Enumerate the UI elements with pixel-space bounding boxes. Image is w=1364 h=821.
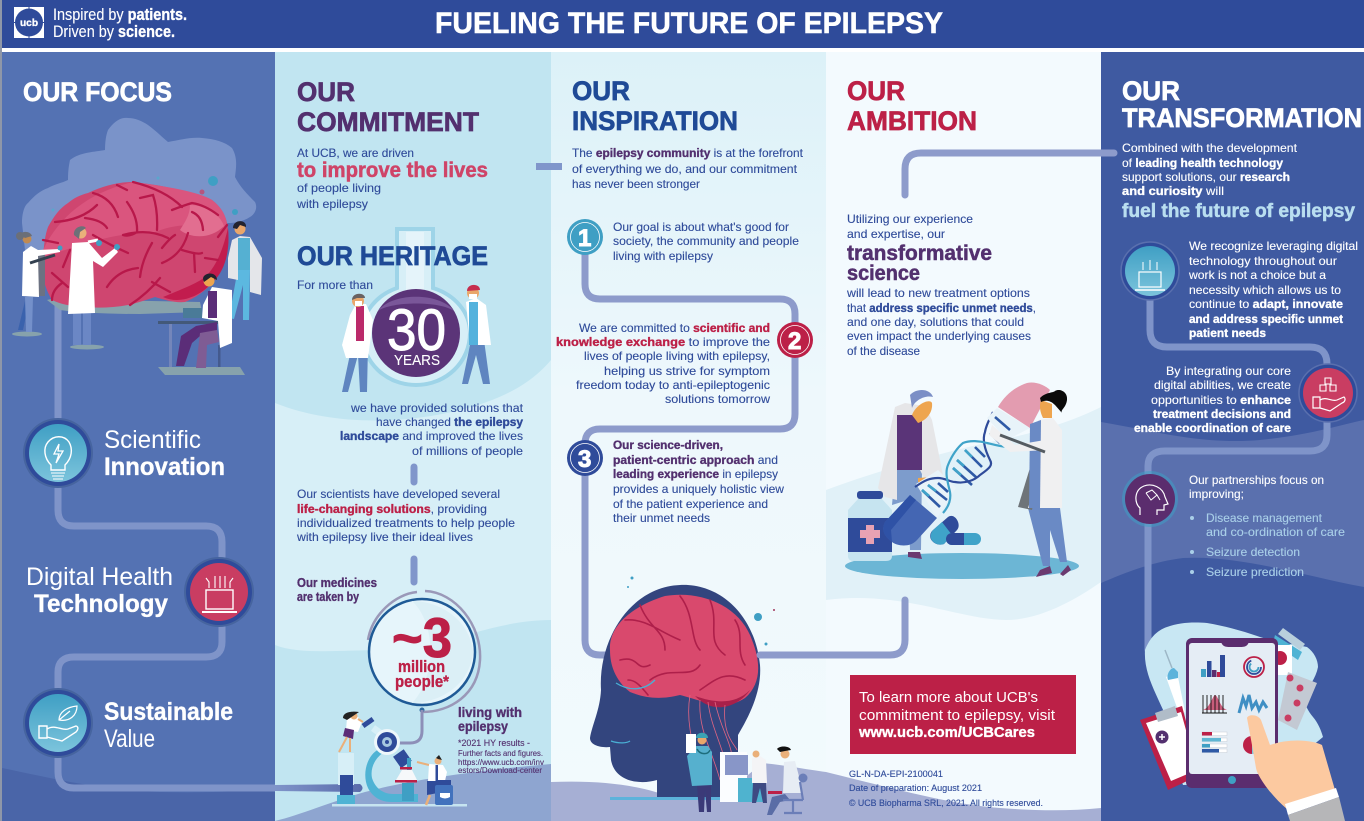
text: digital technology: and address specific unmet [1189, 312, 1343, 326]
legal footer [849, 769, 1043, 808]
text: commitment statement [296, 146, 488, 211]
text: item 2: knowledge exchange to improve the [556, 335, 770, 349]
text: digital technology: necessity which allows us to [1189, 283, 1341, 297]
scientist: man with tie [417, 755, 453, 805]
text: ambition body: will lead to new treatment options [846, 286, 1030, 300]
footnote: *2021 HY results - [458, 738, 530, 748]
doctor [686, 733, 712, 812]
magnifier: 3 million people: million [398, 657, 445, 676]
illustration: brain and scientists [12, 118, 262, 375]
donut chart [1244, 657, 1264, 677]
text: heritage body: landscape and improved the lives [340, 429, 523, 443]
icon: scientific innovation [23, 418, 93, 488]
connector: to magnifier [410, 559, 418, 582]
hand [1247, 715, 1345, 821]
text: item 1: Our goal is about what's good for [613, 220, 789, 234]
heading: our commitment: COMMITMENT [297, 107, 479, 137]
panel: our transformation [1101, 52, 1364, 821]
heading: our inspiration [572, 76, 738, 136]
DNA helix [915, 412, 1010, 513]
text: ambition body: of the disease [847, 344, 920, 358]
heading: our commitment: OUR [297, 77, 355, 107]
UCB logo [14, 7, 44, 38]
magnifier: 3 million people [368, 591, 480, 712]
text: ambition body: and expertise, our [847, 227, 945, 241]
text: digital abilities [1134, 364, 1291, 435]
scientist: left woman [878, 390, 945, 559]
heading: our ambition: OUR [847, 76, 905, 106]
heading: our transformation: OUR [1122, 76, 1180, 106]
scientist: woman on stool [339, 712, 373, 752]
call to action box: www.ucb.com/UCBCares [858, 724, 1035, 741]
text: our medicines: are taken by [297, 590, 359, 604]
text: partnerships: Our partnerships focus on [1189, 473, 1324, 487]
illustration: head with brain [590, 576, 808, 815]
syringe [1165, 650, 1185, 716]
wave chart [1239, 695, 1267, 713]
legal footer: Date of preparation: August 2021 [849, 783, 982, 793]
list: partnership areas: Seizure detection [1206, 545, 1300, 559]
text: scientists body: with epilepsy live their ideal lives [296, 530, 473, 544]
text: item 1: living with epilepsy [613, 249, 713, 263]
text: inspiration intro: has never been stronger [572, 177, 700, 191]
text: item 2: freedom today to anti-epileptogenic [576, 378, 770, 392]
text: digital technology: work is not a choice but a [1188, 268, 1326, 282]
list: partnership areas [1190, 511, 1345, 579]
text: heritage body: of millions of people [412, 444, 523, 458]
text: ambition body: Utilizing our experience [847, 212, 973, 226]
heading: our inspiration: OUR [572, 76, 630, 106]
magnifier: 3 million people: people* [395, 672, 449, 691]
tablet device [1186, 638, 1278, 788]
text: digital abilities: opportunities to enhance [1151, 393, 1291, 407]
horizontal bars [1202, 732, 1227, 752]
icon: laptop [1121, 242, 1179, 300]
capsules [883, 470, 981, 546]
text: digital abilities: treatment decisions and [1153, 407, 1291, 421]
text: our medicines [297, 576, 377, 604]
text: ambition body: transformative [847, 242, 992, 265]
text: transformation intro: support solutions, our research [1122, 170, 1290, 184]
text: scientists body [296, 487, 515, 544]
text: ambition body: that address specific unmet needs, [847, 301, 1036, 315]
label: scientific innovation [104, 426, 225, 481]
badge: 1: 1 [578, 225, 591, 252]
list: partnership areas: and co-ordination of care [1206, 525, 1345, 539]
heading: our ambition [847, 76, 977, 136]
text: digital abilities: digital abilities, we create [1154, 378, 1291, 392]
text: item 2: lives of people living with epilepsy, [584, 349, 770, 363]
panel: our ambition [826, 52, 1101, 821]
text: partnerships: improving; [1189, 487, 1244, 501]
label: scientific innovation: Scientific [104, 426, 201, 454]
text: item 1 [613, 220, 799, 263]
pink capsule [987, 382, 1050, 443]
text: item 2: helping us strive for symptom [604, 364, 770, 378]
lab workers and monitor [720, 746, 808, 815]
text: ambition body [846, 212, 1036, 358]
text: item 3: of the patient experience and [613, 497, 768, 511]
pill packs and bottle [1273, 628, 1317, 730]
pie chart [1243, 736, 1262, 754]
footnote [458, 738, 544, 775]
connector: head to ambition [760, 600, 905, 655]
label: digital health technology: Digital Health [26, 563, 173, 591]
scientist: standing man [228, 221, 262, 320]
footnote: estors/Download-center [458, 766, 542, 775]
magnifier: 3 million people: ~3 [392, 606, 452, 669]
icon: head [1122, 471, 1178, 527]
legal footer: GL-N-DA-EPI-2100041 [849, 769, 943, 779]
text: transformation intro: fuel the future of epilepsy [1122, 201, 1355, 222]
text: heritage body: have changed the epilepsy [376, 415, 523, 429]
text: digital technology: technology throughout our [1189, 254, 1337, 268]
tagline [53, 5, 187, 41]
text: transformation intro [1122, 141, 1355, 222]
connector path: focus [58, 305, 275, 788]
badge: 2: 2 [788, 328, 801, 355]
text: heritage heading: OUR HERITAGE [297, 241, 488, 271]
text: heritage body [340, 401, 524, 458]
heading: our focus: OUR FOCUS [23, 77, 172, 107]
text: item 3: patient-centric approach and [613, 453, 778, 467]
text: commitment statement: At UCB, we are driven [297, 146, 414, 160]
panel: our focus [2, 52, 275, 821]
badge: 2 [777, 322, 813, 358]
text: living with epilepsy: epilepsy [458, 718, 508, 734]
text: ambition body: even impact the underlying causes [847, 329, 1031, 343]
text: digital technology: We recognize leveraging digital [1189, 239, 1358, 253]
badge: 1 [567, 219, 603, 255]
text: digital abilities: By integrating our core [1166, 364, 1291, 378]
text: scientists body: Our scientists have developed several [297, 487, 500, 501]
heading: our commitment [297, 77, 479, 137]
text: digital technology: continue to adapt, innovate [1189, 297, 1343, 311]
text: item 3: provides a uniquely holistic view [613, 482, 784, 496]
text: transformation intro: of leading health technology [1122, 156, 1283, 170]
label: digital health technology [26, 563, 173, 618]
text: transformation intro: and curiosity will [1122, 184, 1224, 198]
text: item 1: society, the community and people [613, 234, 799, 248]
legal footer: © UCB Biopharma SRL, 2021. All rights reserved. [849, 798, 1043, 808]
clipboard [1140, 706, 1200, 790]
connector: ambition to transformation [905, 153, 1114, 195]
label: scientific innovation: Innovation [104, 453, 225, 481]
badge: 3: 3 [578, 446, 591, 473]
list: partnership areas: Seizure prediction [1206, 565, 1304, 579]
heading: our inspiration: INSPIRATION [572, 106, 738, 136]
spike chart [1202, 695, 1227, 713]
list: partnership areas: Disease management [1206, 511, 1323, 525]
text: item 2: solutions tomorrow [665, 392, 770, 406]
text: scientists body: life-changing solutions, providing [297, 502, 487, 516]
text: item 2 [556, 321, 770, 406]
text: commitment statement: with epilepsy [296, 197, 368, 211]
text: inspiration intro: The epilepsy community is at the forefront [572, 146, 804, 160]
text: item 2: We are committed to scientific and [579, 321, 770, 335]
icon: digital health [184, 557, 254, 627]
badge: 3 [567, 440, 603, 476]
text: heritage body: we have provided solutions that [350, 401, 524, 415]
text: item 3: Our science-driven, [613, 438, 723, 452]
text: digital technology: patient needs [1189, 326, 1266, 340]
text: item 3: their unmet needs [613, 511, 710, 525]
text: for more than: For more than [297, 278, 373, 292]
scientist: man [462, 285, 491, 384]
text: inspiration intro [572, 146, 804, 191]
label: sustainable value: Sustainable [104, 698, 233, 726]
scientist: woman with tablet [12, 232, 62, 336]
connector: stub commitment to inspiration [536, 163, 562, 170]
scientist: man at centre [68, 226, 120, 350]
text: item 3: leading experience in epilepsy [613, 467, 778, 481]
illustration: tablet with charts [1140, 622, 1345, 821]
connector path: inspiration [585, 255, 795, 655]
text: our medicines: Our medicines [297, 576, 377, 590]
label: digital health technology: Technology [34, 590, 168, 618]
text: commitment statement: to improve the lives [297, 159, 488, 182]
text: scientists body: individualized treatments to help people [297, 516, 515, 530]
text: inspiration intro: of everything we do, and our commitment [572, 162, 798, 176]
text: ambition body: and one day, solutions that could [847, 315, 1024, 329]
title: FUELING THE FUTURE OF EPILEPSY [435, 7, 943, 40]
connector: short [410, 467, 418, 482]
heading: our transformation [1122, 76, 1362, 133]
text: digital technology [1188, 239, 1358, 340]
scientist: woman [342, 294, 373, 392]
tagline: Driven by science. [53, 22, 175, 41]
bottle [848, 491, 892, 561]
call to action box [850, 675, 1076, 754]
illustration: DNA and medicine [845, 382, 1079, 579]
scientist: seated man [158, 274, 245, 375]
text: item 3 [613, 438, 784, 525]
text: commitment statement: of people living [297, 181, 381, 195]
footnote: https://www.ucb.com/inv [458, 758, 544, 767]
call to action box: To learn more about UCB's [859, 689, 1038, 706]
panel: our commitment [275, 52, 551, 821]
connector path: transformation [1148, 300, 1327, 650]
text: living with epilepsy [458, 704, 522, 734]
bar chart [1201, 655, 1225, 677]
text: ambition body: science [847, 262, 920, 285]
icon: sustainable value [23, 688, 93, 758]
footnote: Further facts and figures. [458, 749, 543, 758]
text: digital abilities: enable coordination of care [1134, 421, 1291, 435]
tagline: Inspired by patients. [53, 5, 187, 24]
illustration: microscope and scientists [332, 710, 467, 806]
panel: our inspiration [551, 52, 826, 821]
call to action box: commitment to epilepsy, visit [859, 707, 1056, 724]
icon: hand with blocks [1299, 364, 1357, 422]
text: transformation intro: Combined with the development [1122, 141, 1298, 155]
text: partnerships [1189, 473, 1324, 501]
label: sustainable value [104, 698, 233, 753]
illustration: flask with 30 years: 30 [387, 298, 446, 363]
illustration: flask with 30 years [342, 229, 491, 392]
text: living with epilepsy: living with [458, 704, 522, 720]
label: sustainable value: Value [104, 725, 155, 753]
UCB logo: ucb [20, 18, 38, 29]
connector: focus to commitment taper [275, 784, 362, 792]
heading: our ambition: AMBITION [847, 106, 977, 136]
scientist: right woman [989, 390, 1071, 577]
illustration: flask with 30 years: YEARS [394, 352, 440, 369]
